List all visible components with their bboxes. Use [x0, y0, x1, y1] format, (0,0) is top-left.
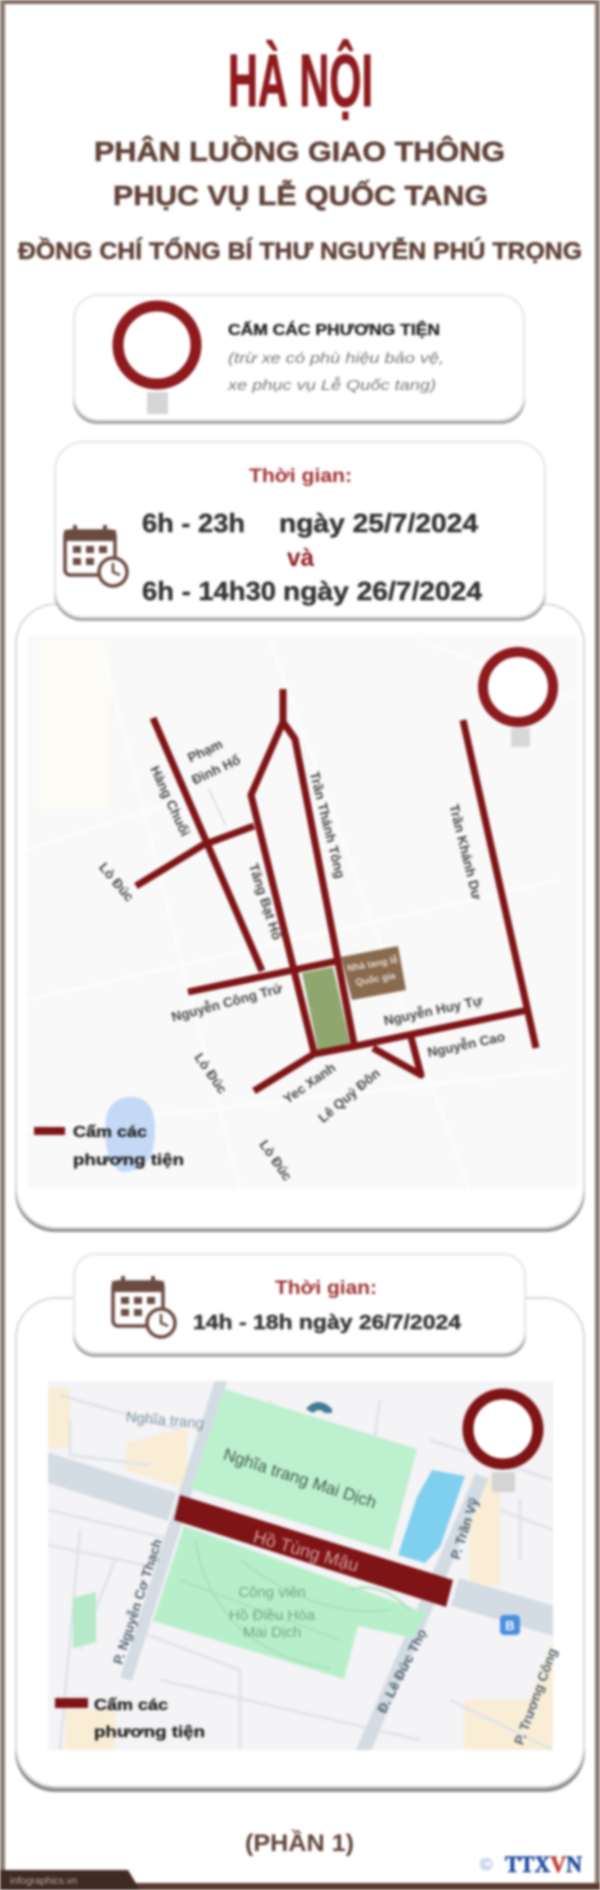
- map 2 labels: Công viên: [238, 1584, 306, 1601]
- icon: no vehicles sign: [118, 306, 196, 414]
- map 2 labels: Hồ Điều Hòa: [229, 1607, 316, 1624]
- map 1 street labels: Lê Quý Đôn: [315, 1065, 383, 1126]
- map 1 street labels: Lò Đúc: [256, 1137, 295, 1184]
- map 1 street labels: Nguyễn Công Trứ: [170, 981, 284, 1025]
- time range 26/7: ngày 26/7/2024: [283, 576, 483, 606]
- time range 25/7: [142, 508, 479, 538]
- time range 2: 14h - 18h ngày 26/7/2024: [193, 1312, 462, 1334]
- notice exception text: xe phục vụ Lễ Quốc tang): [227, 377, 436, 394]
- map 2 labels: Nghĩa trang Mai Dịch: [221, 1445, 379, 1512]
- icon: calendar and clock 2: [113, 1276, 175, 1337]
- icon: calendar and clock: [65, 525, 127, 586]
- map 1 street labels: Yec Xanh: [281, 1060, 338, 1107]
- title: HÀ NỘI: [228, 39, 373, 122]
- time range 26/7: [142, 576, 483, 606]
- map 2 legend: Cấm các: [94, 1697, 168, 1714]
- map 2 labels: P. Nguyễn Cơ Thạch: [110, 1537, 165, 1666]
- notice exception text: (trừ xe có phù hiệu bảo vệ,: [228, 350, 444, 367]
- map 1 funeral hall block: [341, 946, 406, 1000]
- map 1 legend: Cấm các: [73, 1124, 147, 1141]
- icon: map 2 no vehicles sign: [468, 1394, 538, 1492]
- map 1 street labels: Đình Hổ: [189, 752, 243, 788]
- bottom bar: infographics.vn: [10, 1876, 77, 1887]
- map 2 labels: P. Trương Công: [511, 1646, 560, 1747]
- map 2 lake: [398, 1470, 465, 1563]
- subtitle line 1: PHÂN LUỒNG GIAO THÔNG: [94, 135, 505, 167]
- map 2 legend: phương tiện: [94, 1724, 205, 1741]
- time range 25/7: 6h - 23h: [142, 508, 245, 538]
- time heading 2: Thời gian:: [275, 1278, 377, 1299]
- map 1 street labels: Trần Khánh Dư: [446, 803, 484, 901]
- map 1 street labels: Lò Đúc: [191, 1050, 230, 1097]
- map 1 banned roads: [136, 689, 536, 1091]
- notice exception text: [227, 350, 444, 394]
- map 1 street labels: Phạm: [185, 736, 225, 765]
- icon: map 1 no vehicles sign: [483, 652, 553, 747]
- icon: bus stop marker: B: [505, 1618, 515, 1633]
- map 2 labels: Nghĩa trang: [125, 1409, 205, 1432]
- map 2 cemetery: [191, 1389, 417, 1551]
- subtitle line 3: ĐỒNG CHÍ TỔNG BÍ THƯ NGUYỄN PHÚ TRỌNG: [18, 236, 582, 265]
- connector word: và: [287, 544, 314, 572]
- credit logo: TTXVN: [505, 1852, 582, 1877]
- panel: time window 1: [54, 442, 546, 621]
- map 2 labels: P. Trần Vỹ: [448, 1496, 482, 1561]
- map 1 street labels: Tăng Bạt Hổ: [246, 861, 285, 942]
- part label: (PHẦN 1): [245, 1829, 354, 1857]
- map 1 green park block: [302, 967, 350, 1050]
- map 2 base: [47, 1380, 554, 1751]
- time range 26/7: 6h - 14h30: [142, 576, 276, 606]
- time heading: Thời gian:: [249, 466, 352, 487]
- map 1 street labels: [96, 736, 506, 1184]
- map 1 street labels: Nguyễn Huy Tự: [382, 993, 484, 1028]
- map 2 banned road: Hồ Tùng Mậu: [251, 1526, 361, 1576]
- map 2 banned road: [174, 1495, 453, 1607]
- credit logo: ©: [480, 1855, 493, 1874]
- map 1 legend: phương tiện: [73, 1152, 184, 1169]
- panel: map 2: [15, 1298, 585, 1792]
- map 1 legend: [34, 1124, 184, 1169]
- panel: map 1: [15, 604, 585, 1232]
- panel: prohibition notice: [73, 295, 525, 424]
- map 2 labels: Đ. Lê Đức Thọ: [374, 1626, 430, 1715]
- bottom bar: [0, 1870, 600, 1890]
- panel: time window 2: [73, 1254, 526, 1357]
- map 1 funeral hall block: Nhà tang lễ: [346, 955, 399, 974]
- time range 25/7: ngày 25/7/2024: [279, 508, 479, 538]
- map 2 legend: [55, 1697, 205, 1741]
- map 2 labels: [110, 1409, 560, 1747]
- map 1 background: [27, 635, 578, 1190]
- notice heading: CẤM CÁC PHƯƠNG TIỆN: [228, 320, 440, 339]
- icon: bus stop marker: [500, 1615, 520, 1635]
- map 1 street labels: Hàng Chuối: [147, 764, 193, 839]
- subtitle line 2: PHỤC VỤ LỄ QUỐC TANG: [113, 179, 488, 211]
- map 2 monument icon: [306, 1402, 332, 1413]
- map 1 street labels: Lò Đúc: [96, 860, 137, 905]
- map 1 street labels: Nguyễn Cao: [426, 1029, 506, 1060]
- map 2 labels: Mai Dịch: [243, 1624, 301, 1641]
- map 1 street labels: Trần Thánh Tông: [307, 770, 348, 880]
- map 2 park: [153, 1526, 427, 1679]
- map 1 funeral hall block: Quốc gia: [355, 970, 397, 988]
